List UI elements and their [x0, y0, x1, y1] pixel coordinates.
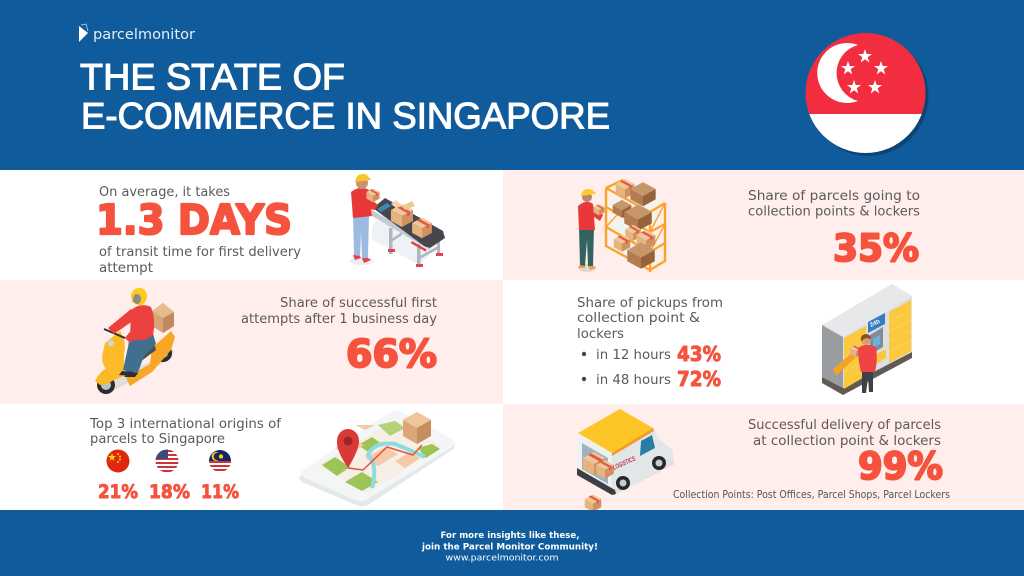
Malaysia share: 11%	[201, 481, 239, 503]
panel: first attempts	[0, 280, 503, 404]
origins label: parcels to Singapore	[90, 431, 225, 447]
collection points note: Collection Points: Post Offices, Parcel Shops, Parcel Lockers	[673, 489, 950, 501]
footer text: For more insights like these,	[440, 531, 580, 541]
collection share label: Share of parcels going to	[748, 188, 920, 204]
origins label	[89, 416, 282, 447]
header band	[0, 0, 1024, 170]
title: THE STATE OF	[80, 56, 345, 98]
illustration: parcel locker: 24h	[869, 319, 882, 329]
icon: China flag	[106, 450, 130, 472]
pickups label: collection point &	[577, 310, 700, 326]
title: E-COMMERCE IN SINGAPORE	[81, 96, 610, 136]
transit intro text: On average, it takes	[99, 184, 230, 200]
35 percent figure: 35%	[833, 227, 919, 270]
icon: Singapore flag	[800, 30, 930, 158]
illustration: worker at conveyor belt	[350, 174, 445, 267]
icon: small parcel	[585, 494, 601, 512]
delivery label	[748, 417, 941, 449]
pickups label: Share of pickups from	[577, 295, 723, 311]
USA share: 18%	[149, 481, 190, 503]
footer text: www.parcelmonitor.com	[446, 554, 558, 564]
footer band	[0, 510, 1024, 576]
transit description: attempt	[99, 260, 153, 276]
illustration: worker at shelves	[578, 179, 665, 272]
48 hours row: 72%	[677, 367, 721, 391]
icon: USA flag	[156, 450, 178, 472]
illustration: phone with map	[300, 410, 455, 506]
China share: 21%	[98, 481, 138, 503]
logo: parcelmonitor	[93, 27, 195, 43]
first attempt label: Share of successful first	[280, 295, 437, 311]
title	[80, 56, 610, 136]
footer text	[421, 531, 598, 564]
collection share label: collection points & lockers	[748, 204, 920, 220]
12 hours row: 43%	[677, 342, 721, 366]
delivery label: Successful delivery of parcels	[748, 417, 941, 433]
pickups label	[577, 295, 723, 342]
12 hours row	[582, 342, 721, 366]
transit description	[99, 244, 301, 276]
pickups label: lockers	[577, 326, 624, 342]
panel: international origins	[90, 410, 455, 506]
footer text: join the Parcel Monitor Community!	[421, 542, 598, 552]
origins label: Top 3 international origins of	[89, 416, 282, 432]
icon: Malaysia flag	[209, 450, 231, 472]
12 hours row: in 12 hours	[596, 347, 671, 363]
99 percent figure: 99%	[858, 445, 943, 488]
panel: transit time	[0, 170, 503, 280]
illustration: delivery van	[577, 409, 675, 495]
transit number: 1.3 DAYS	[96, 196, 292, 244]
collection share label	[748, 188, 920, 220]
panel: delivery at collection points	[503, 404, 1024, 512]
panel: pickups	[503, 280, 1024, 404]
48 hours row	[582, 367, 721, 391]
first attempt label	[241, 295, 437, 327]
transit description: of transit time for first delivery	[99, 244, 301, 260]
panel: collection point share	[503, 170, 1024, 280]
illustration: scooter courier	[95, 288, 175, 394]
illustration: delivery van: LOGISTICS	[612, 456, 637, 472]
48 hours row: in 48 hours	[596, 372, 671, 388]
first attempt label: attempts after 1 business day	[241, 311, 437, 327]
66 percent figure: 66%	[346, 332, 437, 376]
delivery label: at collection point & lockers	[753, 433, 941, 449]
illustration: parcel locker	[822, 284, 912, 395]
